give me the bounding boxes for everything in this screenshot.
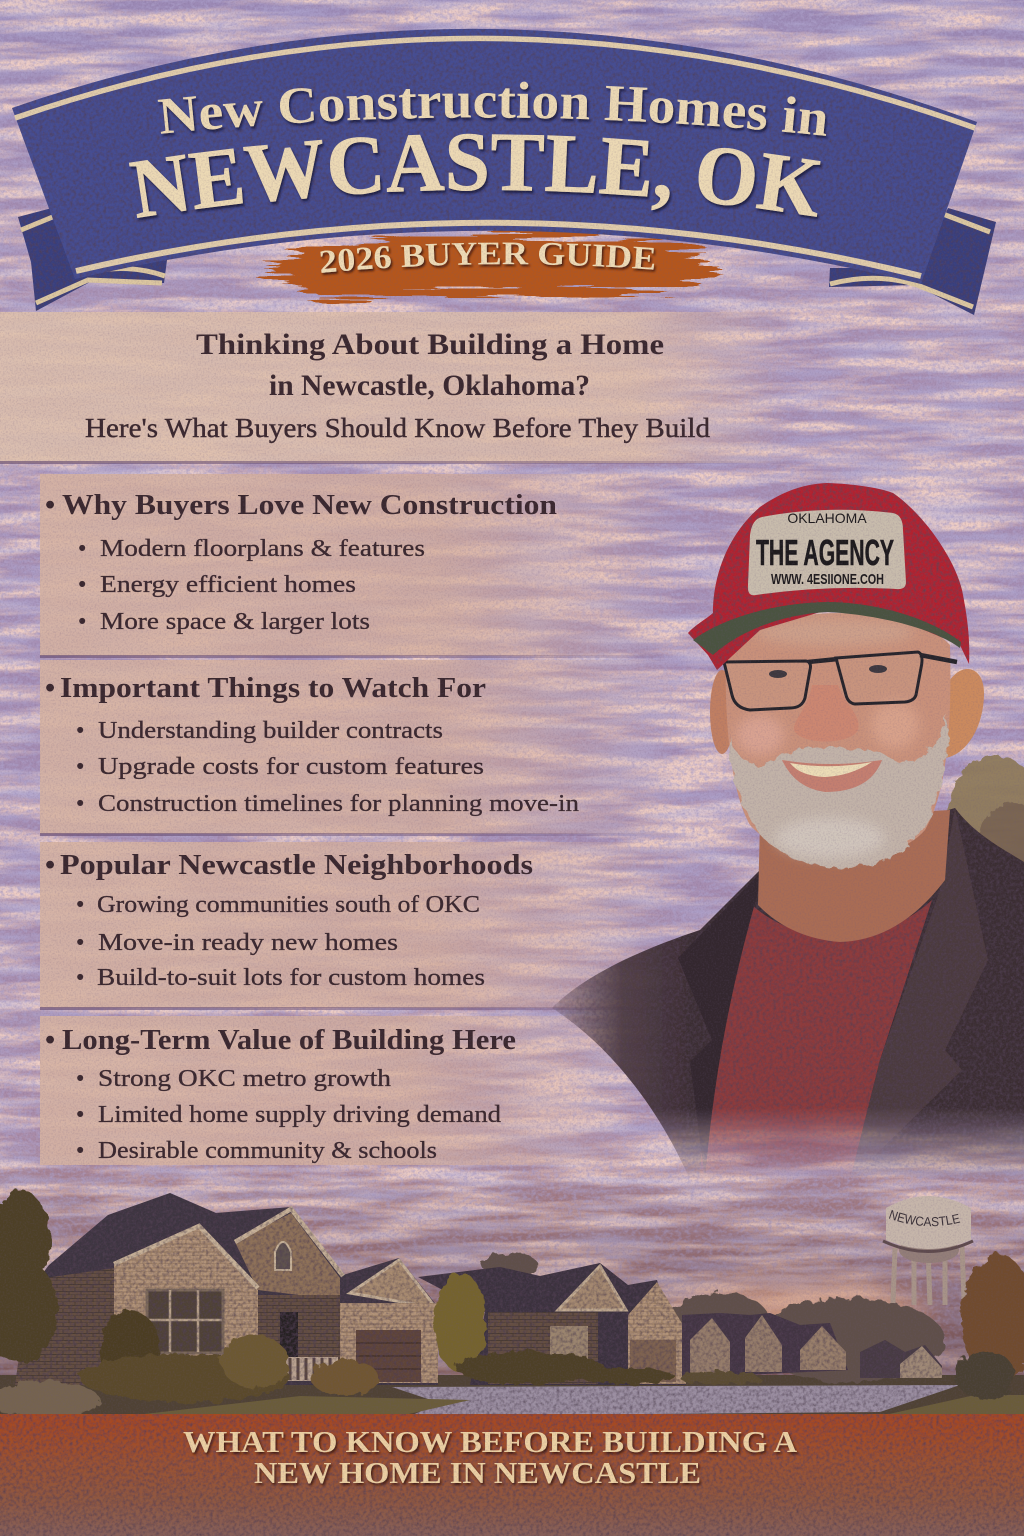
list: watch for: • bbox=[76, 754, 84, 780]
heading: neighborhoods: • bbox=[45, 849, 55, 881]
front window bbox=[147, 1290, 223, 1353]
list: neighborhoods: Growing communities south of OKC bbox=[97, 892, 480, 918]
panel: why buyers love new construction bbox=[40, 474, 680, 658]
title line 1: New Construction Homes in bbox=[158, 82, 828, 140]
patch text oklahoma: OKLAHOMA bbox=[787, 510, 867, 526]
list: watch for: • bbox=[76, 718, 84, 744]
jacket and shirt bbox=[552, 808, 1024, 1180]
list: why buyers love: • bbox=[78, 609, 86, 635]
right ribbon tail bbox=[829, 208, 996, 315]
list: neighborhoods: • bbox=[76, 965, 84, 991]
list: why buyers love: • bbox=[78, 536, 86, 562]
title line 2: NEWCASTLE, OK bbox=[128, 134, 823, 222]
intro heading line 1: Thinking About Building a Home bbox=[196, 328, 664, 361]
panel: long-term value bbox=[40, 1016, 640, 1165]
water tower bbox=[882, 1196, 974, 1305]
list: why buyers love: • bbox=[78, 572, 86, 598]
banner upper stripe bbox=[15, 38, 975, 128]
list: long-term value: Limited home supply driving demand bbox=[98, 1102, 501, 1128]
left ear bbox=[710, 670, 734, 754]
neighborhood scene bbox=[0, 1188, 1024, 1414]
list: long-term value: • bbox=[76, 1138, 84, 1164]
porch bbox=[258, 1295, 340, 1361]
intro panel bbox=[0, 312, 790, 464]
list: watch for: Upgrade costs for custom features bbox=[98, 754, 484, 780]
list: neighborhoods: Move-in ready new homes bbox=[98, 930, 398, 956]
heading: long-term value: • bbox=[45, 1024, 55, 1056]
face shading bbox=[736, 618, 919, 755]
right ear bbox=[945, 669, 984, 758]
portrait of agent bbox=[552, 483, 1024, 1180]
heading: why buyers love: Why Buyers Love New Construction bbox=[62, 489, 557, 521]
cap crown bbox=[688, 483, 969, 670]
left ribbon tail bbox=[18, 208, 167, 311]
list: watch for: Construction timelines for planning move-in bbox=[98, 791, 579, 817]
caption line 1: WHAT TO KNOW BEFORE BUILDING A bbox=[183, 1424, 798, 1459]
glasses bbox=[724, 652, 957, 710]
mouth and teeth bbox=[782, 760, 882, 792]
list: watch for bbox=[76, 718, 579, 817]
beard bbox=[729, 715, 947, 868]
list: why buyers love: Energy efficient homes bbox=[100, 572, 356, 598]
list: long-term value: • bbox=[76, 1102, 84, 1128]
cap patch bbox=[748, 510, 906, 595]
heading: why buyers love: • bbox=[45, 489, 55, 521]
heading: watch for: • bbox=[45, 672, 55, 704]
distant houses bbox=[682, 1313, 942, 1378]
ground base bbox=[0, 1375, 1024, 1420]
lawn bbox=[110, 1395, 1024, 1418]
road bbox=[392, 1385, 960, 1416]
list: long-term value: • bbox=[76, 1066, 84, 1092]
chin highlight bbox=[775, 818, 885, 858]
list: neighborhoods bbox=[76, 892, 485, 991]
shrubs bbox=[0, 1310, 760, 1418]
list: why buyers love: Modern floorplans & features bbox=[100, 536, 425, 562]
list: watch for: Understanding builder contracts bbox=[98, 718, 443, 744]
panel: popular newcastle neighborhoods bbox=[40, 842, 680, 1010]
ribbon banner bbox=[12, 28, 996, 315]
cap brim underside bbox=[693, 602, 961, 655]
bottom caption band bbox=[0, 1414, 1024, 1536]
banner main body bbox=[12, 29, 977, 284]
orange brush stroke bbox=[262, 232, 722, 298]
list: watch for: • bbox=[76, 791, 84, 817]
list: neighborhoods: • bbox=[76, 892, 84, 918]
list: long-term value: Strong OKC metro growth bbox=[98, 1066, 391, 1092]
banner lower stripe bbox=[76, 223, 921, 276]
list: why buyers love: More space & larger lots bbox=[100, 609, 370, 635]
list: neighborhoods: • bbox=[76, 930, 84, 956]
neck bbox=[758, 810, 950, 942]
list: long-term value: Desirable community & schools bbox=[98, 1138, 437, 1164]
face bbox=[726, 613, 950, 859]
intro heading line 2: in Newcastle, Oklahoma? bbox=[269, 369, 590, 402]
heading: neighborhoods: Popular Newcastle Neighborhoods bbox=[60, 849, 533, 881]
nose bbox=[794, 685, 859, 742]
right tree bbox=[955, 1254, 1024, 1399]
eyes bbox=[769, 665, 887, 678]
house 2 bbox=[418, 1263, 686, 1385]
house 1: main home bbox=[15, 1193, 438, 1385]
heading: watch for: Important Things to Watch For bbox=[60, 672, 486, 704]
list: why buyers love bbox=[78, 536, 425, 635]
right background tree bbox=[949, 756, 1024, 878]
subtitle: 2026 buyer guide: 2026 BUYER GUIDE bbox=[320, 242, 657, 276]
background tree line bbox=[482, 1253, 945, 1382]
panel: important things to watch for bbox=[40, 660, 680, 836]
list: neighborhoods: Build-to-suit lots for custom homes bbox=[97, 965, 485, 991]
left tree bbox=[0, 1190, 486, 1372]
caption line 2: NEW HOME IN NEWCASTLE bbox=[254, 1455, 701, 1490]
patch text url: WWW. 4ESIIONE.COH bbox=[771, 571, 884, 588]
water tower label: NEWCASTLE bbox=[889, 1210, 960, 1226]
heading: long-term value: Long-Term Value of Building Here bbox=[62, 1024, 516, 1056]
patch text the agency: THE AGENCY bbox=[756, 532, 894, 573]
intro subheading: Here's What Buyers Should Know Before They Build bbox=[85, 413, 711, 443]
list: long-term value bbox=[76, 1066, 501, 1164]
